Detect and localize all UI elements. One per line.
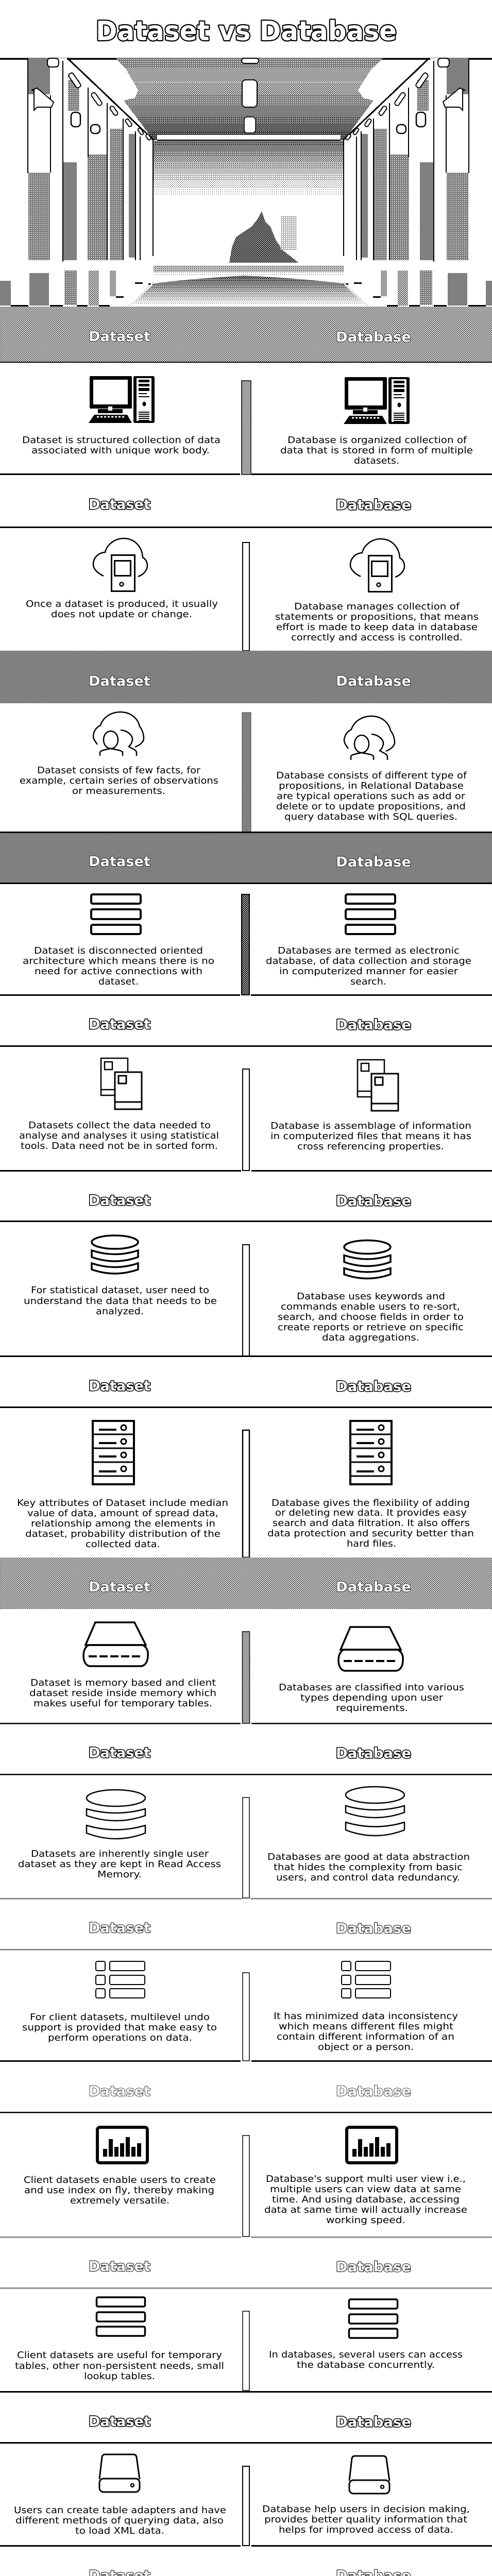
- row 14: object model: [0, 2568, 492, 2576]
- centre divider bar: [243, 1973, 249, 2061]
- hero image: data centre aisle: [0, 58, 492, 307]
- icon: documents, database: [358, 1060, 398, 1111]
- text block: database: It has minimized data inconsistency: [274, 2011, 458, 2022]
- text block: database: requirements.: [336, 1703, 408, 1714]
- centre divider bar: [243, 2311, 249, 2391]
- text block: database: [270, 1121, 471, 1152]
- icon: desktop computer, database: [344, 377, 410, 424]
- text block: database: Database help users in decision making,: [262, 2504, 470, 2515]
- icon: database cylinder, dataset: [92, 1235, 138, 1274]
- heading: Dataset: Dataset: [89, 1378, 150, 1394]
- text block: database: delete or to update propositions, and: [276, 801, 466, 812]
- icon: bar chart, database: [347, 2127, 397, 2163]
- text block: database: contain different information of an: [277, 2031, 454, 2042]
- row 11: index on the fly: [0, 2083, 492, 2238]
- text block: database: Databases are termed as electronic: [278, 945, 460, 956]
- centre divider bar: [243, 1798, 249, 1898]
- text block: dataset: makes useful for temporary tables.: [33, 1698, 212, 1709]
- heading: Database: Database: [336, 1193, 411, 1209]
- text block: database: [262, 2504, 470, 2535]
- heading: Database: Database: [336, 2083, 411, 2099]
- text block: database: working speed.: [326, 2215, 405, 2226]
- text block: dataset: Dataset is disconnected oriented: [34, 945, 203, 956]
- text block: database: statements or propositions, that means: [275, 612, 479, 622]
- icon: documents, dataset: [101, 1058, 142, 1109]
- text block: database: cross referencing properties.: [297, 1141, 444, 1152]
- row 3: facts and propositions: [0, 651, 492, 832]
- text block: database: Database's support multi user view i.e.,: [266, 2174, 466, 2184]
- text block: database: time. And using database, accessing: [272, 2194, 460, 2205]
- text block: dataset: [23, 945, 214, 987]
- text block: database: database, of data collection and storage: [266, 956, 471, 967]
- text block: dataset: [24, 1285, 217, 1317]
- text block: dataset: For client datasets, multilevel undo: [30, 2012, 210, 2023]
- text block: dataset: dataset, probability distribution of the: [25, 1529, 220, 1539]
- text block: database: or deleting new data. It provides easy: [275, 1507, 467, 1518]
- text block: dataset: architecture which means there is no: [23, 956, 214, 967]
- heading: Dataset: Dataset: [89, 1016, 150, 1032]
- header band: [0, 651, 492, 703]
- text block: dataset: dataset reside inside memory which: [29, 1688, 216, 1699]
- text block: dataset: [24, 2175, 216, 2206]
- icon: server rack, dataset: [93, 1421, 134, 1484]
- centre divider bar: [242, 894, 249, 995]
- text block: dataset: to load XML data.: [75, 2526, 164, 2536]
- heading: Dataset: Dataset: [89, 2259, 150, 2275]
- text block: dataset: need for active connections with: [35, 966, 202, 977]
- text block: database: object or a person.: [318, 2042, 414, 2053]
- heading: Database: Database: [336, 329, 411, 345]
- text block: dataset: analyzed.: [96, 1306, 144, 1317]
- text block: dataset: Users can create table adapters and have: [14, 2505, 226, 2516]
- text block: database: Databases are classified into various: [279, 1682, 464, 1693]
- heading: Dataset: Dataset: [89, 2414, 150, 2430]
- text block: dataset: relationship among the elements in: [31, 1518, 215, 1529]
- text block: database: search and data filtration. It also offers: [273, 1518, 470, 1529]
- text block: dataset: [17, 1498, 228, 1550]
- text block: database: the database concurrently.: [297, 2360, 435, 2370]
- text block: database: provides better quality information that: [264, 2514, 467, 2525]
- text block: database: Database is assemblage of information: [270, 1121, 471, 1131]
- text block: dataset: or measurements.: [72, 786, 165, 796]
- text block: dataset: [22, 2012, 217, 2043]
- row 8: memory: [0, 1557, 492, 1724]
- text block: dataset: Datasets are inherently single user: [31, 1849, 209, 1859]
- icon: drive, database: [349, 2456, 389, 2494]
- text block: dataset: [20, 765, 218, 796]
- text block: dataset: lookup tables.: [84, 2371, 155, 2382]
- text block: database: in computerized files that means it has: [270, 1131, 471, 1142]
- row 6: statistical use: [0, 1193, 492, 1357]
- row 13: table adapters: [0, 2414, 492, 2547]
- text block: database: [276, 770, 467, 822]
- text block: dataset: collected data.: [86, 1539, 160, 1550]
- text block: database: effort is made to keep data in database: [276, 622, 478, 633]
- icon: desktop computer, dataset: [89, 376, 155, 423]
- text block: database: [278, 1291, 464, 1343]
- text block: dataset: [15, 2350, 224, 2382]
- icon: bar chart, dataset: [97, 2127, 147, 2163]
- row 1: Dataset vs Database definition: [0, 307, 492, 475]
- row 9: single user: [0, 1745, 492, 1899]
- icon: server rack, database: [350, 1421, 392, 1484]
- text block: dataset: different methods of querying data, also: [15, 2515, 224, 2526]
- icon: hard drive, dataset: [83, 1622, 148, 1666]
- text block: database: hard files.: [347, 1538, 396, 1549]
- centre divider bar: [242, 713, 251, 832]
- heading: Database: Database: [336, 1379, 411, 1395]
- text block: database: are typical operations such as add or: [277, 791, 466, 802]
- text block: database definition: Database is organized collection of: [287, 435, 467, 446]
- centre divider bar: [243, 2466, 249, 2546]
- heading: Dataset: Dataset: [89, 1193, 150, 1209]
- heading: Database: Database: [336, 673, 411, 689]
- text block: database: [269, 2349, 463, 2370]
- text block: database: [267, 1852, 470, 1883]
- heading: Dataset: Dataset: [89, 1745, 150, 1761]
- text block: dataset: does not update or change.: [51, 609, 192, 620]
- text block: dataset: [18, 1849, 221, 1880]
- heading: Database: Database: [336, 1745, 411, 1761]
- text block: database definition: data that is stored in form of multiple: [280, 445, 473, 456]
- text block: database: types depending upon user: [300, 1692, 444, 1703]
- text block: dataset: Memory.: [97, 1869, 142, 1880]
- text block: database: [275, 601, 479, 643]
- text block: dataset: example, certain series of observations: [20, 775, 218, 786]
- text block: database: helps for improved access of data.: [279, 2524, 453, 2535]
- text block: database: Databases are good at data abstraction: [267, 1852, 470, 1862]
- text block: dataset: [26, 599, 218, 620]
- text block: database: In databases, several users can access: [269, 2349, 463, 2360]
- heading: Dataset: Dataset: [89, 1579, 150, 1595]
- icon: database stack, database: [346, 1787, 404, 1836]
- row 4: architecture: [0, 832, 492, 996]
- text block: database: multiple users can view data at same: [270, 2184, 461, 2195]
- text block: database: that hides the complexity from basic: [274, 1862, 463, 1873]
- text block: dataset: Client datasets are useful for temporary: [17, 2350, 222, 2361]
- icon: table rows, database: [342, 1961, 391, 1998]
- heading: Dataset: Dataset: [89, 1920, 150, 1936]
- text block: database: data at same time will actually increase: [264, 2205, 467, 2215]
- text block: database definition: datasets.: [354, 455, 399, 466]
- heading: Dataset: Dataset: [89, 854, 150, 870]
- text block: dataset: Client datasets enable users to create: [24, 2175, 216, 2185]
- heading: Dataset: Dataset: [89, 497, 150, 513]
- text block: database: query database with SQL queries.: [284, 811, 457, 822]
- text block: database: data protection and security better than: [267, 1528, 474, 1539]
- heading: Database: Database: [336, 1017, 411, 1033]
- row 10: undo support: [0, 1920, 492, 2062]
- text block: database: data aggregations.: [322, 1332, 419, 1343]
- text block: database: in computerized manner for easier: [279, 966, 459, 977]
- centre divider bar: [243, 2136, 249, 2236]
- text block: database: search.: [350, 976, 386, 987]
- text block: dataset: tools. Data need not be in sorted form.: [21, 1141, 218, 1151]
- icon: cloud people, dataset: [93, 712, 144, 756]
- text block: database: correctly and access is controlled.: [291, 632, 463, 643]
- text block: dataset: value of data, amount of spread data,: [27, 1508, 218, 1519]
- icon: hard drive, database: [338, 1627, 403, 1671]
- icon: drive, dataset: [99, 2454, 140, 2492]
- centre divider bar: [243, 1430, 249, 1557]
- text block: dataset: perform operations on data.: [48, 2032, 192, 2043]
- text block: dataset: and use index on fly, thereby making: [24, 2185, 214, 2196]
- row 12: temporary tables: [0, 2259, 492, 2393]
- icon: stacked rows, database: [346, 894, 395, 934]
- title: Dataset vs Database: [96, 16, 397, 47]
- text block: dataset: support is provided that make easy to: [22, 2022, 217, 2033]
- heading: Database: Database: [336, 2414, 411, 2430]
- header band: [0, 307, 492, 362]
- icon: cloud people, database: [344, 716, 395, 760]
- icon: table rows, dataset: [96, 1961, 145, 1998]
- icon: database cylinder, database: [344, 1241, 391, 1279]
- text block: dataset: dataset as they are kept in Read Access: [18, 1859, 221, 1870]
- text block: database: Database uses keywords and: [297, 1291, 445, 1302]
- text block: database: [267, 1498, 474, 1549]
- heading: Database: Database: [336, 854, 411, 870]
- heading: Database: Database: [336, 2259, 411, 2275]
- centre divider bar: [243, 1245, 249, 1356]
- text block: database: [274, 2011, 458, 2053]
- text block: database: [279, 1682, 464, 1714]
- heading: Database: Database: [336, 1579, 411, 1595]
- text block: dataset: tables, other non-persistent needs, small: [15, 2361, 224, 2371]
- text block: database definition: [280, 435, 473, 466]
- text block: dataset: [14, 2505, 226, 2536]
- text block: dataset definition: Dataset is structured collection of data: [22, 435, 220, 446]
- text block: database: propositions, in Relational Database: [279, 781, 464, 791]
- icon: stacked rows, dataset: [91, 894, 141, 934]
- text block: dataset: dataset.: [98, 976, 139, 987]
- text block: database: which means different files might: [279, 2021, 453, 2032]
- text block: dataset: Once a dataset is produced, it usually: [26, 599, 218, 609]
- text block: database: [264, 2174, 467, 2226]
- text block: database: Database manages collection of: [294, 601, 460, 612]
- centre divider bar: [243, 543, 249, 651]
- icon: cloud phone, dataset: [93, 538, 147, 591]
- text block: dataset: Datasets collect the data needed to: [28, 1120, 211, 1131]
- heading: Dataset: Dataset: [89, 673, 150, 689]
- text block: database: Database consists of different type of: [276, 770, 467, 781]
- text block: dataset: [19, 1120, 219, 1151]
- text block: dataset definition: associated with unique work body.: [31, 445, 210, 456]
- text block: dataset: [29, 1677, 216, 1709]
- icon: cloud phone, database: [350, 539, 404, 591]
- icon: stacked rows, dataset: [97, 2297, 145, 2336]
- text block: database: Database gives the flexibility of adding: [272, 1498, 470, 1509]
- text block: dataset: Dataset consists of few facts, for: [37, 765, 201, 776]
- centre divider bar: [243, 1069, 249, 1171]
- header band: [0, 1557, 492, 1609]
- text block: database: users, and control data redundancy.: [276, 1872, 460, 1883]
- text block: database: [266, 945, 471, 987]
- text block: dataset: For statistical dataset, user need to: [31, 1285, 209, 1296]
- text block: dataset: Key attributes of Dataset include median: [17, 1498, 228, 1509]
- row 2: update behaviour: [0, 497, 492, 651]
- text block: dataset: extremely versatile.: [70, 2195, 169, 2206]
- text block: dataset definition: [22, 435, 220, 456]
- text block: database: search, and choose fields in order to: [278, 1312, 464, 1323]
- text block: database: commands enable users to re-sort,: [281, 1301, 460, 1312]
- centre divider bar: [242, 381, 251, 474]
- centre divider bar: [242, 1632, 249, 1723]
- row 7: attributes: [0, 1378, 492, 1557]
- heading: Database: Database: [336, 497, 411, 513]
- text block: database: create reports or retrieve on specific: [278, 1322, 464, 1333]
- icon: stacked rows, database: [349, 2299, 398, 2338]
- heading: Dataset: Dataset: [89, 329, 150, 345]
- heading: Database: Database: [336, 1921, 411, 1937]
- header band: [0, 832, 492, 884]
- text block: dataset: understand the data that needs to be: [24, 1296, 217, 1307]
- row 5: data collection: [0, 1016, 492, 1172]
- text block: dataset: analyse and analyses it using statistical: [19, 1130, 219, 1141]
- heading: Dataset: Dataset: [89, 2083, 150, 2099]
- icon: database stack, dataset: [87, 1790, 145, 1839]
- text block: dataset: Dataset is memory based and client: [30, 1677, 216, 1688]
